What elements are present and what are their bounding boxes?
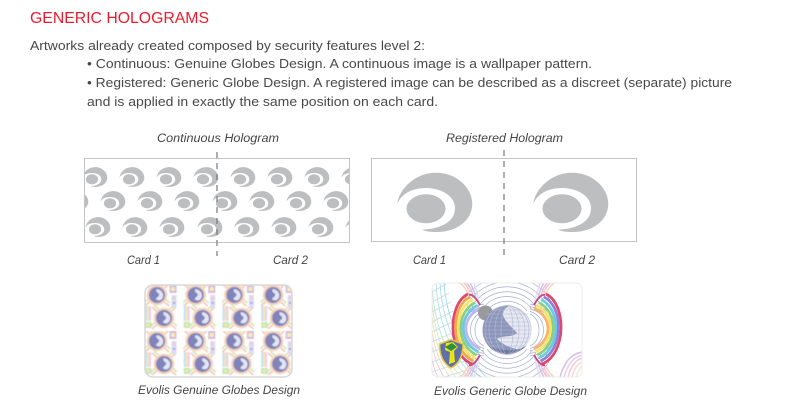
small grey ball	[478, 306, 493, 320]
label: card 2: Card 2	[559, 255, 596, 267]
icon: eye shape on card 2	[533, 173, 608, 232]
title: GENERIC HOLOGRAMS	[30, 10, 209, 27]
text block: introduction	[30, 38, 732, 109]
caption: generic globe design: Evolis Generic Globe Design	[434, 386, 587, 398]
panel: registered hologram	[372, 133, 636, 267]
right rainbow	[534, 294, 561, 364]
label: card 1: Card 1	[127, 255, 160, 267]
globe	[482, 306, 532, 354]
heading: continuous hologram: Continuous Hologram	[157, 133, 279, 145]
image: Evolis Generic Globe card	[432, 277, 582, 383]
shield	[440, 340, 463, 368]
image: Evolis Genuine Globes card	[145, 285, 292, 377]
text block: introduction: • Registered: Generic Globe Design. A registered image can be described as a discreet (separate) picture	[87, 75, 732, 90]
text block: introduction: Artworks already created composed by security features level 2:	[30, 38, 425, 53]
panel: continuous hologram	[84, 133, 350, 264]
mesh corners	[432, 283, 582, 377]
pastel fans above and below rainbows	[460, 284, 481, 306]
caption: genuine globes design: Evolis Genuine Globes Design	[138, 385, 300, 397]
blue field lines	[464, 284, 550, 312]
left rainbow	[453, 294, 480, 364]
icon: eye shape on card 1	[397, 173, 472, 232]
label: card 1: Card 1	[413, 255, 446, 267]
label: card 2: Card 2	[273, 255, 309, 267]
text block: introduction: • Continuous: Genuine Globes Design. A continuous image is a wallpaper pattern.	[87, 56, 592, 71]
text block: introduction: and is applied in exactly the same position on each card.	[87, 94, 438, 109]
heading: registered hologram: Registered Hologram	[446, 133, 563, 145]
diagram: wallpaper pattern of eye shapes	[85, 167, 349, 237]
